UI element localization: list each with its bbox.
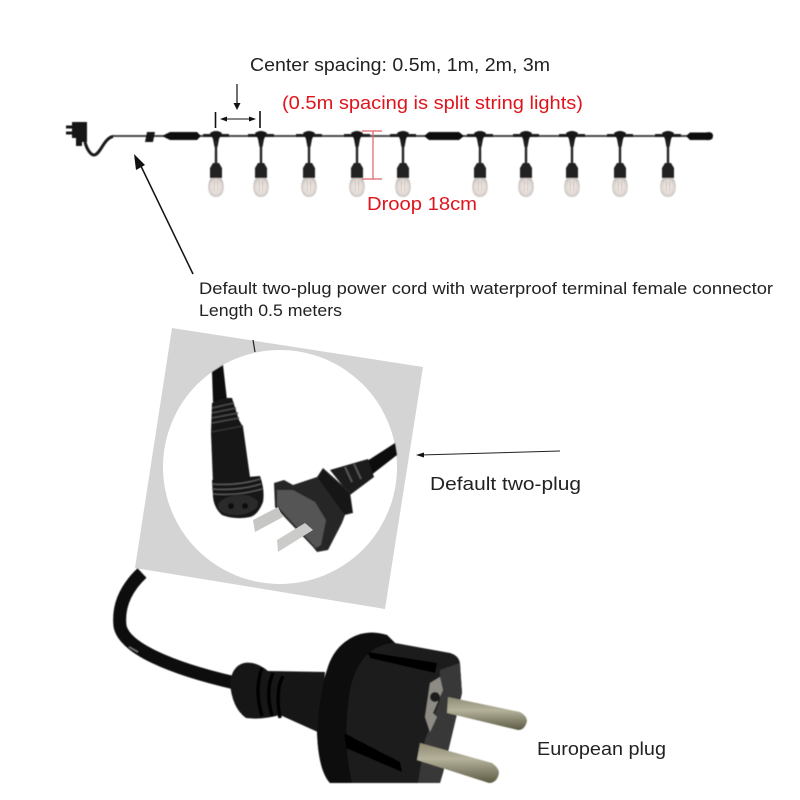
label: default two-plug: Default two-plug [430,473,581,494]
panel: European plug photo [120,573,527,783]
stray line [253,340,255,352]
cable [120,573,235,683]
plug pins [253,507,283,532]
power cord description [199,280,774,320]
string light diagram [66,122,713,197]
power cord description: Length 0.5 meters [199,302,342,320]
plug body [317,633,462,783]
droop label: Droop 18cm [367,193,477,214]
label: European plug: European plug [537,738,666,759]
arrow to power cord [134,154,193,274]
arrow to two-plug [416,451,560,458]
cord clip [145,132,155,142]
grey square backing [135,328,423,609]
plug face [418,663,462,783]
end cap [686,132,713,140]
waterproof connector 1 [162,132,201,140]
waterproof female connector [211,365,264,518]
droop measurement bracket [362,131,382,179]
main wire [112,135,700,137]
spacing arrows [216,84,260,128]
strain relief [330,459,374,495]
two-pin plug [274,443,397,552]
cord [364,443,397,476]
waterproof connector 2 [424,132,464,140]
earth clip [425,677,443,732]
power cord description: Default two-plug power cord with waterproof terminal female connector [199,280,774,298]
power plug at string end [66,122,113,155]
bulbs [203,131,229,197]
plug body [274,468,353,552]
plug flange shading [317,633,395,783]
plug grooves [368,652,437,673]
white circle [163,350,397,584]
heading: center spacing: Center spacing: 0.5m, 1m, 2m, 3m [250,54,550,75]
plug translucent face [277,490,326,548]
metal pins [447,697,527,730]
plug collar [318,470,352,514]
strain relief [230,663,325,733]
heading: split string note: (0.5m spacing is split string lights) [282,92,583,113]
panel: two-plug photo [135,328,423,609]
